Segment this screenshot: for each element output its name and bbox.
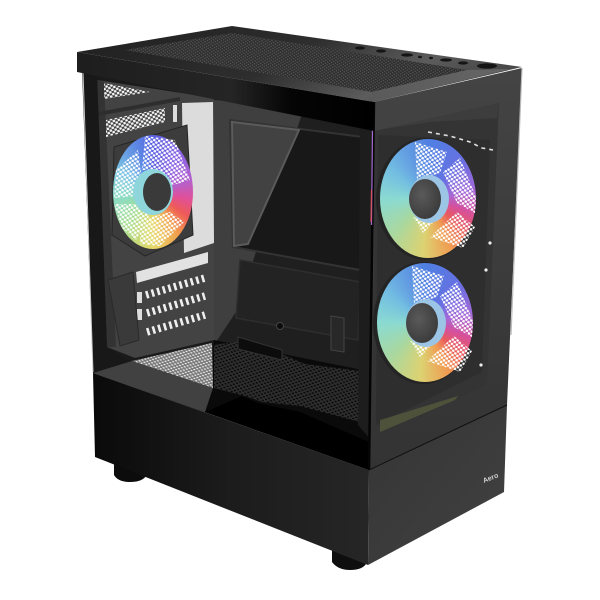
right vent marks low xyxy=(479,363,483,367)
rear panel xyxy=(97,80,214,358)
fan rotor xyxy=(380,139,476,258)
white cutout xyxy=(182,102,214,253)
floor: white mesh xyxy=(132,343,213,388)
black sill xyxy=(205,396,369,470)
vent dashes xyxy=(428,132,493,150)
hub xyxy=(143,173,171,211)
panel: left glass side interior xyxy=(82,60,374,470)
fan perforation xyxy=(410,266,473,372)
logo: Aero xyxy=(482,472,500,485)
hub xyxy=(409,179,441,219)
second vent xyxy=(106,108,165,137)
red edge reflection xyxy=(370,190,372,222)
top front highlight xyxy=(372,69,510,102)
right vent marks top xyxy=(488,241,492,245)
top controls xyxy=(355,46,497,69)
fan perforation xyxy=(414,142,476,248)
tray cutout xyxy=(230,120,363,270)
fan: right lower xyxy=(373,262,474,384)
panel: left frame xyxy=(82,70,132,373)
foot: left xyxy=(114,463,146,482)
upper vent xyxy=(104,83,150,99)
screw hole xyxy=(276,322,284,330)
product illustration: PC case xyxy=(77,26,523,570)
front vertical edge xyxy=(369,102,374,470)
white strip xyxy=(136,252,208,283)
right vent marks mid xyxy=(484,268,488,272)
small slot xyxy=(173,105,177,122)
bracket xyxy=(331,316,344,352)
second slot tab xyxy=(137,309,142,320)
rear panel shadow xyxy=(97,80,116,347)
hub ring xyxy=(406,299,446,347)
floor: dark base xyxy=(205,340,372,445)
panel: top xyxy=(77,26,522,102)
foot: right xyxy=(332,548,366,570)
tray right strip xyxy=(358,120,374,440)
motherboard tray xyxy=(214,100,374,372)
fan frame xyxy=(112,125,193,256)
fan rim xyxy=(376,138,476,260)
left edge highlight xyxy=(83,72,93,372)
right edge highlight xyxy=(511,68,522,335)
PSU slot xyxy=(238,337,282,360)
fan: left rear xyxy=(110,125,195,256)
seam: base right xyxy=(369,405,507,470)
panel: base right side xyxy=(368,405,507,565)
rainbow edge reflection xyxy=(372,130,373,225)
fan perforation xyxy=(114,136,190,246)
upper inner bay xyxy=(375,103,499,131)
expansion slot rails xyxy=(146,278,205,332)
hub ring xyxy=(409,175,449,223)
vent divider xyxy=(98,97,180,116)
slot tabs xyxy=(137,292,142,303)
top mesh xyxy=(125,33,467,92)
fan rotor xyxy=(377,263,473,382)
panel: base front xyxy=(93,373,369,565)
hub xyxy=(406,303,438,343)
inner window xyxy=(372,103,499,440)
tray reflection band xyxy=(214,100,305,345)
fan rotor xyxy=(113,135,193,249)
card guide xyxy=(108,272,139,346)
panel: top front band xyxy=(77,52,374,131)
panel: right glass side xyxy=(369,68,522,470)
fan rim xyxy=(373,262,473,384)
inner panel xyxy=(376,135,490,425)
floor: dark mesh xyxy=(214,340,368,424)
fan: right upper xyxy=(376,138,477,260)
hub ring xyxy=(133,169,173,215)
rainbow floor glow xyxy=(380,396,458,432)
lower glass reflection xyxy=(93,347,213,412)
tray lower section xyxy=(236,260,360,340)
